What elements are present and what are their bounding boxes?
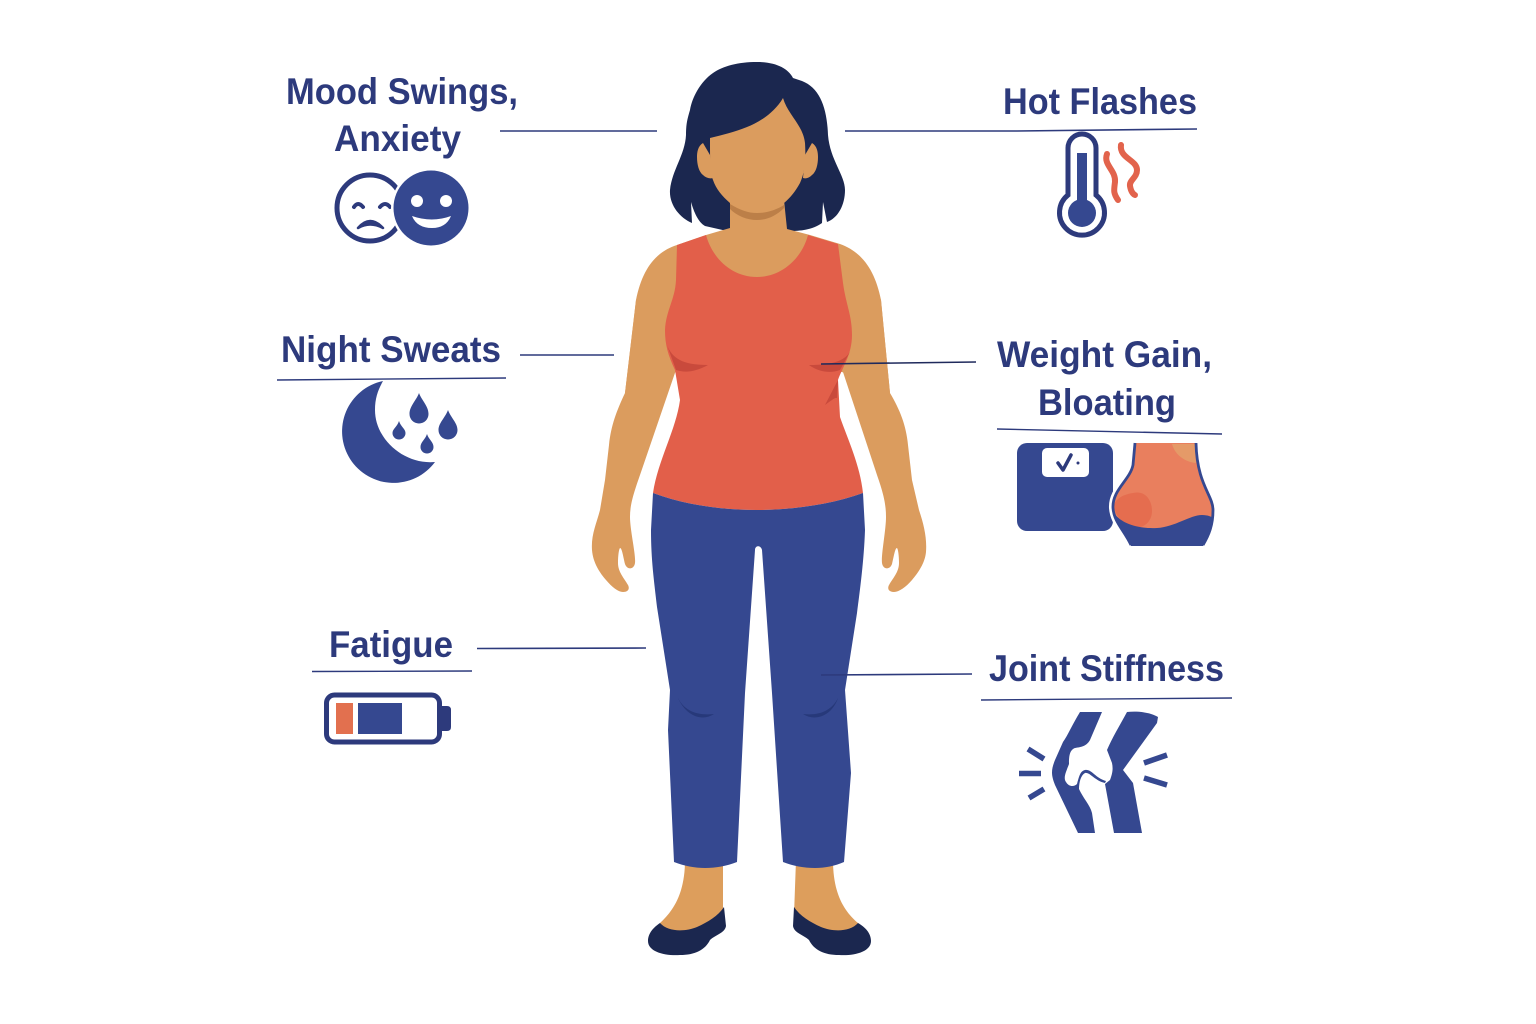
heading: mood swings: Anxiety [334,118,461,159]
icon: sad and happy faces [337,168,471,248]
figure: top shading [667,345,851,405]
leader line: hot flashes [845,129,1197,131]
callout: hot flashes [845,81,1197,235]
figure: right arm [830,260,926,592]
figure: shoes [648,907,871,955]
heading: weight gain: Weight Gain, [997,334,1212,375]
callout: weight gain [821,334,1222,546]
figure: ears [697,143,818,178]
heading: mood swings: Mood Swings, [286,71,518,112]
figure: knee creases [678,698,838,717]
callout: fatigue [312,624,646,742]
heading: fatigue: Fatigue [329,624,453,665]
icon: low battery [326,695,451,742]
leader line: joint stiffness [821,674,972,675]
leader line: night sweats [520,354,614,356]
icon: moon with drops [342,381,458,483]
leader line: fatigue [477,647,646,650]
callout: joint stiffness [821,648,1232,833]
figure: trousers [651,493,865,868]
leader line: mood swings [500,130,657,132]
underline: weight gain [997,429,1222,434]
figure: neck shadow [730,204,784,220]
icon: thermometer with heat waves [1060,134,1137,235]
underline: fatigue [312,670,472,672]
heading: joint stiffness: Joint Stiffness [989,648,1224,689]
callout: mood swings [286,71,657,248]
icon: bloated belly [1113,443,1213,546]
figure: left arm [592,260,690,592]
figure: neck and shoulders [625,200,890,393]
underline: joint stiffness [981,698,1232,700]
figure: tank top [653,235,863,510]
figure: hair [670,62,845,231]
figure: lower legs [660,860,858,940]
leader line: weight gain [821,362,976,364]
icon: knee joint [1019,712,1167,833]
heading: weight gain [997,334,1212,423]
heading: weight gain: Bloating [1038,382,1176,423]
figure: face [710,98,805,212]
heading: hot flashes: Hot Flashes [1003,81,1197,122]
central figure [592,62,926,955]
callout: night sweats [277,329,614,483]
underline: night sweats [277,378,506,380]
heading: mood swings [286,71,518,159]
icon: bathroom scale [1017,443,1113,531]
heading: night sweats: Night Sweats [281,329,501,370]
